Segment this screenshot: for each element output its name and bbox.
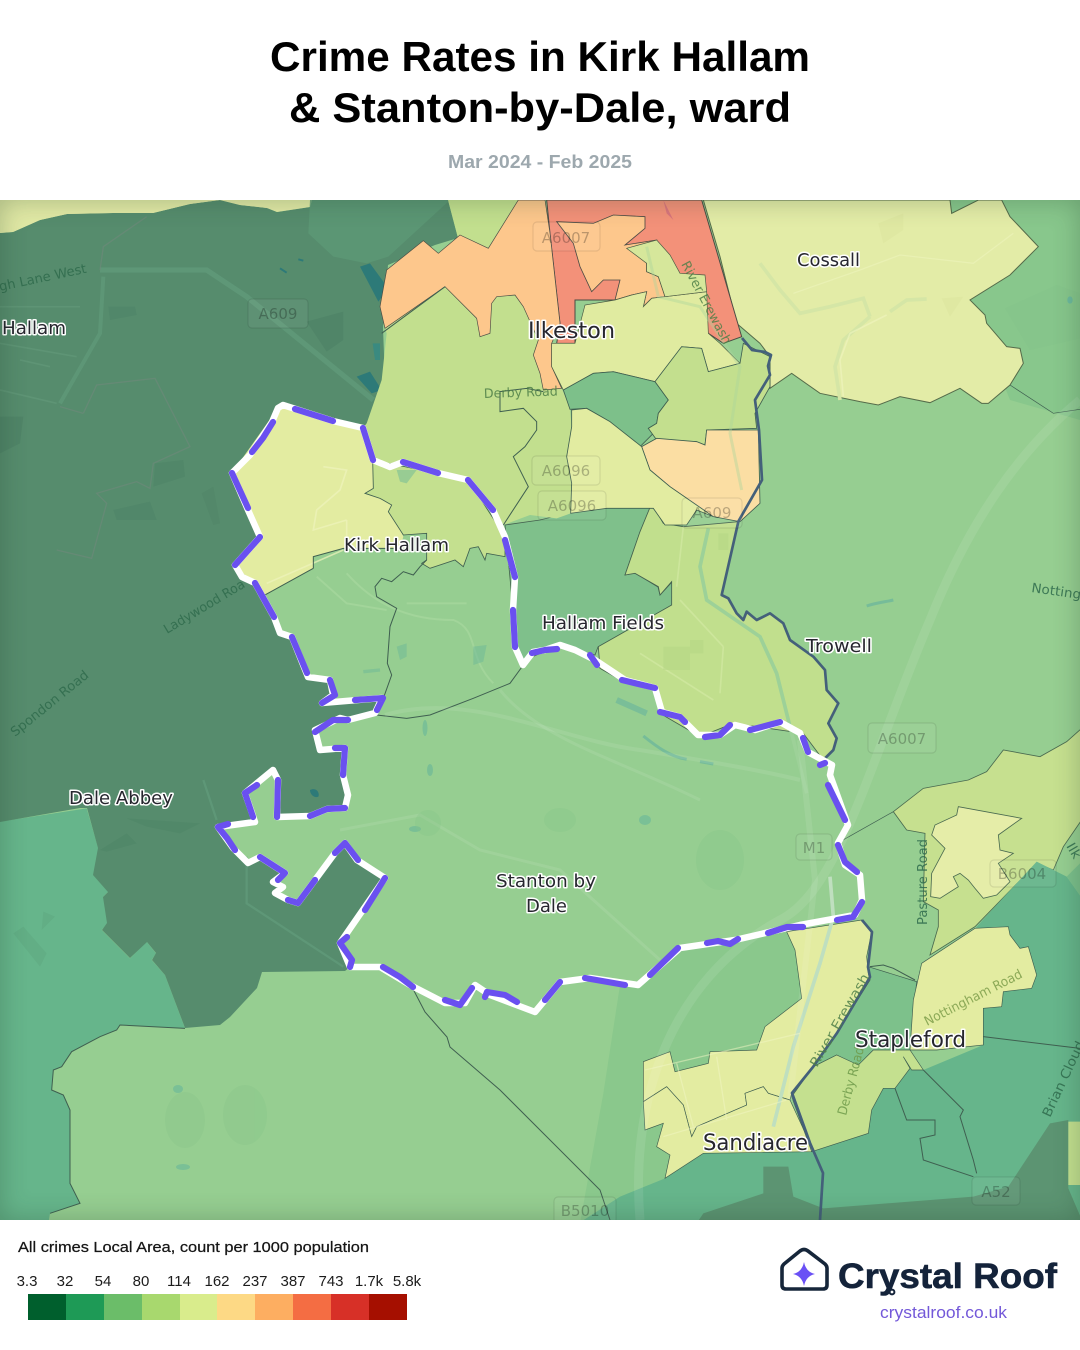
water and wood patches <box>173 720 651 1170</box>
place labels: Dale <box>526 896 567 917</box>
road shields: A609 <box>693 504 731 522</box>
area: north patch <box>448 200 518 248</box>
road shields <box>248 222 1056 1223</box>
place labels: Ilkeston <box>528 319 615 344</box>
strip wave fill <box>0 200 312 233</box>
legend scale numbers: 162 <box>204 1273 230 1290</box>
river boundary: Erewash <box>722 522 838 760</box>
choropleth map <box>0 200 1080 1227</box>
legend colour bar <box>28 1294 407 1320</box>
area: north east green <box>945 200 1080 420</box>
road shields: B5010 <box>561 1202 609 1220</box>
legend scale numbers: 1.7k <box>355 1273 384 1290</box>
legend title: All crimes Local Area, count per 1000 population <box>18 1239 369 1256</box>
title <box>270 33 810 131</box>
title: Crime Rates in Kirk Hallam <box>270 33 810 80</box>
title: & Stanton-by-Dale, ward <box>289 84 791 131</box>
road shields: M1 <box>803 839 825 857</box>
website link: crystalroof.co.uk <box>880 1304 1008 1322</box>
road names: Derby Road <box>484 384 558 402</box>
road names: Derby Road <box>835 1046 868 1117</box>
road names: River Erewash <box>677 259 734 347</box>
area: top strip <box>14 200 266 232</box>
area: bottom left teal <box>0 808 185 1223</box>
legend scale numbers: 237 <box>242 1273 268 1290</box>
area: Cossall yellow <box>703 200 1080 413</box>
legend scale numbers: 32 <box>57 1273 73 1290</box>
legend scale numbers: 743 <box>318 1273 344 1290</box>
ward boundary: Kirk Hallam and Stanton-by-Dale <box>218 405 862 1012</box>
road shields: B6004 <box>998 865 1046 883</box>
road shields: A6007 <box>542 229 590 247</box>
place labels: Hallam <box>2 318 66 339</box>
legend scale numbers: 54 <box>95 1273 111 1290</box>
dark area lower details <box>13 780 343 967</box>
legend scale numbers: 80 <box>133 1273 149 1290</box>
road shields: A609 <box>259 305 297 323</box>
area: Hallam Fields teal <box>505 505 672 662</box>
place labels: Dale Abbey <box>69 788 173 809</box>
place labels: Sandiacre <box>703 1131 808 1156</box>
road shields: A52 <box>981 1183 1011 1201</box>
legend scale numbers: 5.8k <box>393 1273 422 1290</box>
road names <box>0 259 1080 1120</box>
legend scale numbers <box>17 1273 422 1290</box>
area: Kirk Hallam <box>232 405 523 718</box>
road names: Ladywood Roa <box>161 577 248 637</box>
place labels: Trowell <box>805 636 872 657</box>
area: south east districts <box>573 860 1080 1227</box>
road shields: A6007 <box>878 730 926 748</box>
legend scale numbers: 3.3 <box>17 1273 37 1290</box>
south boundary line <box>412 987 610 1220</box>
place labels: Cossall <box>797 250 860 271</box>
road names: Notting <box>1030 581 1080 603</box>
road names: gh Lane West <box>0 262 88 295</box>
place labels <box>2 250 966 1156</box>
dark area details <box>0 200 450 558</box>
legend scale numbers: 387 <box>280 1273 306 1290</box>
area: Ilkeston districts <box>363 200 770 525</box>
date range subtitle: Mar 2024 - Feb 2025 <box>448 152 632 172</box>
road names: Spondon Road <box>8 668 92 740</box>
road names: River Erewash <box>807 972 873 1070</box>
place labels: Hallam Fields <box>542 613 664 634</box>
area: NE Stapleford <box>840 728 1080 955</box>
legend scale numbers: 114 <box>167 1273 191 1290</box>
place labels: Kirk Hallam <box>344 535 449 556</box>
road shields: A6096 <box>548 497 596 515</box>
roads <box>340 400 1080 1220</box>
road names: Pasture Road <box>916 839 931 925</box>
area: Dale Abbey dark <box>0 200 458 1028</box>
road shields: A6096 <box>542 462 590 480</box>
place labels: Stapleford <box>855 1028 966 1053</box>
place labels: Stanton by <box>496 871 596 892</box>
logo: house icon <box>782 1250 827 1289</box>
road names: Nottingham Road <box>922 967 1025 1030</box>
logo: wordmark: Crystal Roof <box>838 1257 1057 1296</box>
area: Hallam Fields light green <box>598 508 894 766</box>
